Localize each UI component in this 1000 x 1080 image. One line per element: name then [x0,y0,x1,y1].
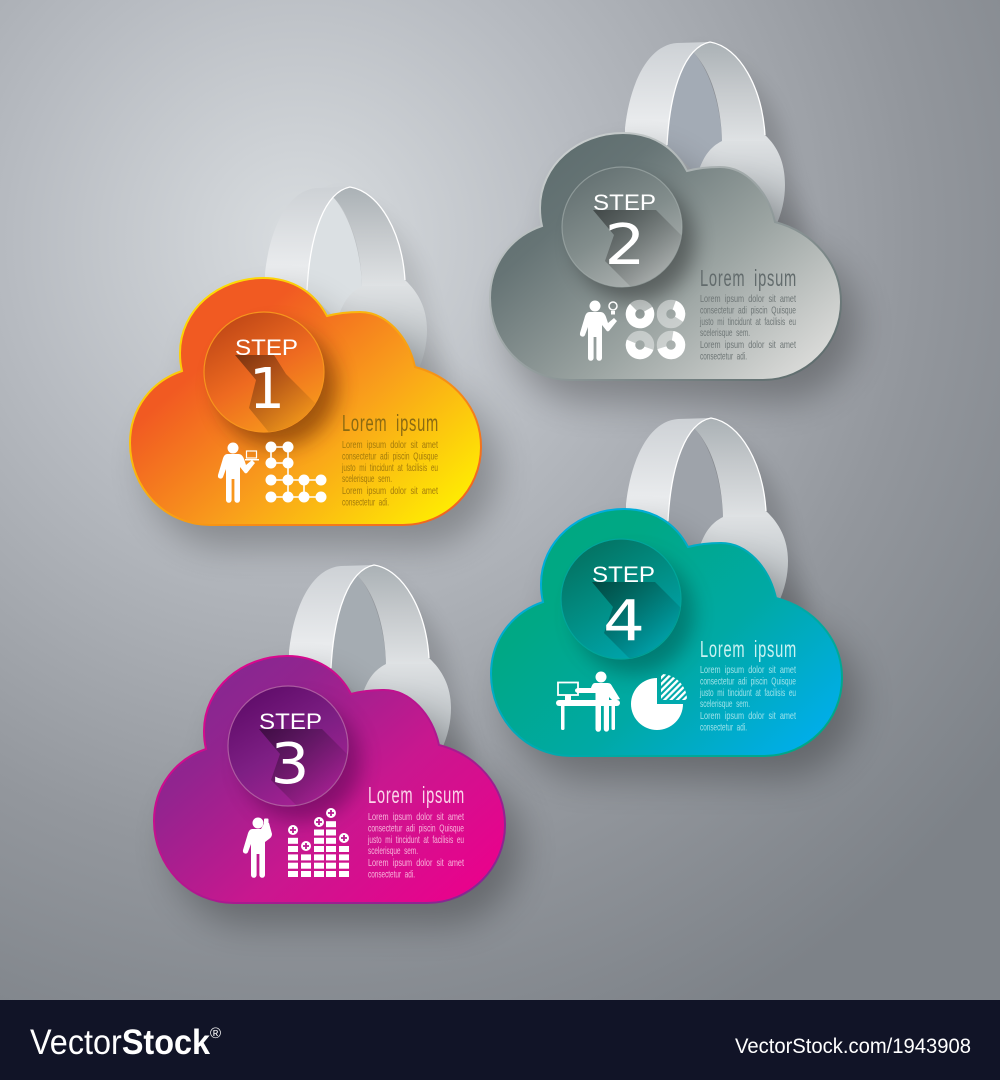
cloud shadow: step 1 [146,300,497,547]
body text: step 3: consectetur adi. [368,868,415,880]
body text: step 4: consectetur adi. [700,722,747,734]
body text: step 1: justo mi tincidunt at facilisis eu [341,462,438,474]
body text: step 1: scelerisque sem. [342,473,392,485]
panel: step 1 [130,187,497,547]
cloud shadow: step 4 [507,531,858,778]
label: step 2: STEP [593,190,656,215]
heading: step 4: Lorem ipsum [700,636,797,662]
body text: step 3: scelerisque sem. [368,845,418,857]
icon: person with laptop [218,442,259,503]
badge: step 4 [561,539,705,683]
label: step 3: STEP [259,709,322,734]
body text: step 2: consectetur adi. [700,350,747,362]
body text: step 4 [699,664,796,734]
body text: step 1: consectetur adi piscin Quisque [342,450,438,462]
body text: step 4: Lorem ipsum dolor sit amet [700,664,796,676]
body text: step 4: consectetur adi piscin Quisque [700,676,796,688]
body text: step 2: scelerisque sem. [700,327,750,339]
label: step 4: STEP [592,562,655,587]
badge: step 2 [562,167,706,311]
heading: step 1: Lorem ipsum [342,410,439,436]
registered mark: ® [210,1025,221,1042]
number 1: 1 [249,357,285,422]
label: step 1: STEP [235,335,298,360]
icon: node network [266,442,326,502]
cloud: step 4 [491,509,842,756]
cloud: step 2 [490,133,841,380]
cloud shadow: step 3 [170,678,521,925]
panel: step 4 [491,418,858,778]
body text: step 2: consectetur adi piscin Quisque [700,304,796,316]
icon: person with light bulb [580,300,617,361]
cloud: step 1 [130,278,481,525]
icon: pie chart [631,674,687,730]
icon: bar chart with plus markers [288,808,349,877]
body text: step 3: justo mi tincidunt at facilisis eu [367,834,464,846]
body text: step 4: scelerisque sem. [700,698,750,710]
panel: step 2 [490,42,857,402]
body text: step 1: Lorem ipsum dolor sit amet [342,485,438,497]
body text: step 3: Lorem ipsum dolor sit amet [368,811,464,823]
heading: step 2: Lorem ipsum [700,265,797,291]
watermark bar [0,1000,1000,1080]
body text: step 2: Lorem ipsum dolor sit amet [700,293,796,305]
strap: step 2 [625,42,810,243]
body text: step 2 [699,293,796,362]
cloud shadow: step 2 [506,155,857,402]
icon: person on phone [243,818,272,878]
body text: step 1: Lorem ipsum dolor sit amet [342,439,438,451]
body text: step 1: consectetur adi. [342,496,389,508]
logo: VectorStock: VectorStock [30,1023,210,1062]
icon: person at desk [556,672,620,732]
body text: step 1 [341,439,438,508]
body text: step 3: consectetur adi piscin Quisque [368,822,464,834]
image id: VectorStock.com/1943908 [735,1035,971,1058]
body text: step 4: Lorem ipsum dolor sit amet [700,710,796,722]
strap: step 4 [626,418,811,619]
strap: step 3 [289,565,474,766]
cloud: step 3 [154,656,505,903]
body text: step 3: Lorem ipsum dolor sit amet [368,857,464,869]
number 2: 2 [604,213,646,278]
panel: step 3 [154,565,521,925]
body text: step 3 [367,811,464,880]
strap: step 1 [265,187,450,388]
badge: step 3 [228,686,372,830]
heading: step 3: Lorem ipsum [368,782,465,808]
badge: step 1 [204,312,337,458]
number 3: 3 [270,732,310,797]
body text: step 2: Lorem ipsum dolor sit amet [700,339,796,351]
body text: step 4: justo mi tincidunt at facilisis eu [699,687,796,699]
body text: step 2: justo mi tincidunt at facilisis eu [699,316,796,328]
icon: four donut charts [627,301,683,357]
number 4: 4 [603,589,645,654]
